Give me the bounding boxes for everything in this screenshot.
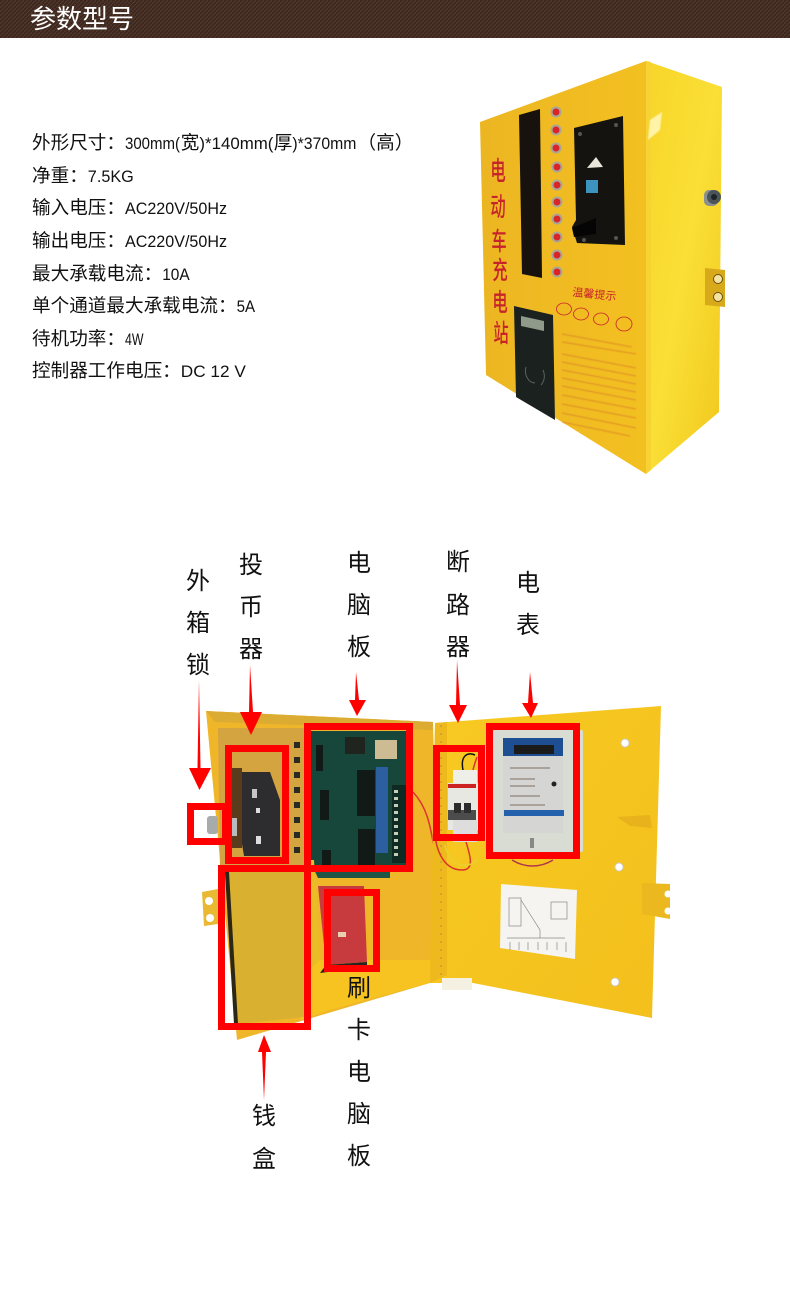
station name (490, 151, 509, 350)
money box (225, 860, 320, 1024)
spec: input voltage (32, 193, 227, 220)
breaker wiring (435, 754, 478, 870)
spec: dimensions: 300mm( (125, 134, 180, 153)
spec: dimensions: 外形尺寸： (32, 128, 125, 155)
specification list (32, 128, 413, 383)
arrow: money box (258, 1035, 271, 1100)
wiring diagram (500, 884, 577, 959)
label: money box: 盒 (252, 1139, 276, 1174)
spec: net weight: 净重： (32, 161, 88, 188)
spec: dimensions: )*140mm( (199, 134, 274, 153)
spec: input voltage: 输入电压： (32, 193, 125, 220)
spec: output voltage: 输出电压： (32, 226, 125, 253)
label: card board: 卡 (347, 1010, 371, 1045)
channel buttons (552, 108, 562, 276)
spec: net weight: 7.5KG (88, 167, 134, 186)
side bracket (202, 889, 218, 926)
coin acceptor (572, 116, 625, 245)
holes (611, 739, 629, 986)
label: control board: 电 (347, 543, 371, 578)
label: card board: 板 (347, 1136, 371, 1171)
station name: 电 (492, 283, 508, 319)
door panel (430, 706, 672, 1018)
spec: dimensions: 宽 (181, 128, 199, 155)
arrow: outer lock (189, 680, 211, 790)
spec: channel current: 5A (237, 297, 256, 316)
label: outer lock: 锁 (186, 645, 210, 680)
label: coin acceptor: 器 (239, 629, 263, 664)
label: card board: 脑 (347, 1094, 371, 1129)
station name: 动 (490, 187, 506, 225)
spec: controller voltage: 控制器工作电压： (32, 356, 181, 383)
spec: dimensions (32, 128, 413, 155)
spec: output voltage (32, 226, 227, 253)
arrow: breaker (449, 660, 467, 723)
flow ovals (556, 303, 632, 331)
label: coin acceptor: 投 (239, 545, 263, 580)
spec: dimensions: 厚 (274, 128, 292, 155)
spec: standby power: 待机功率： (32, 324, 125, 351)
red highlight boxes (190, 726, 576, 1026)
control circuit board (311, 731, 407, 878)
header title: 参数型号 (30, 0, 134, 36)
label: control board: 板 (347, 627, 371, 662)
notice lines (562, 334, 636, 436)
red arrows (189, 660, 538, 1100)
highlight: money box (222, 868, 308, 1026)
highlight: outer lock (190, 806, 226, 842)
cable knobs (294, 742, 300, 858)
spec: output voltage: AC220V/50Hz (125, 232, 227, 251)
label: card board: 电 (347, 1052, 371, 1087)
lock (704, 190, 721, 206)
highlight: card board (328, 892, 376, 968)
spec: standby power: 4W (125, 330, 144, 349)
spec: net weight (32, 161, 134, 188)
station name: 车 (491, 222, 507, 258)
hinge clip (617, 815, 652, 828)
spec: max current: 最大承载电流： (32, 259, 162, 286)
lock bolt (207, 816, 237, 836)
station name: 电 (490, 151, 506, 189)
exploded photo: opened charging station (202, 706, 672, 1040)
label: outer lock: 箱 (186, 603, 210, 638)
label: outer lock: 外 (186, 561, 210, 596)
label: card board: 刷 (347, 968, 371, 1003)
station name: 站 (493, 314, 509, 350)
card reader board (318, 886, 367, 973)
white tab (442, 978, 472, 990)
label: breaker: 器 (446, 627, 470, 662)
spec: input voltage: AC220V/50Hz (125, 199, 227, 218)
internal cables (413, 792, 436, 864)
coin mechanism (232, 768, 280, 856)
interior of cabinet (206, 711, 440, 1040)
electricity meter (493, 730, 583, 866)
highlight: breaker (436, 748, 482, 838)
header bar (0, 0, 790, 38)
tips heading: 温馨提示 (572, 284, 617, 304)
spec: max current: 10A (162, 265, 190, 284)
arrow: control board (349, 672, 366, 716)
highlight: control board (308, 726, 410, 868)
circuit breaker (448, 770, 478, 842)
label: breaker: 断 (446, 542, 470, 577)
spec: controller voltage (32, 356, 246, 383)
label: money box: 钱 (252, 1096, 276, 1131)
spec: dimensions: （高） (358, 128, 413, 155)
label: meter: 表 (516, 605, 540, 640)
station name: 充 (492, 251, 508, 287)
highlight: meter (490, 726, 576, 856)
door bracket (642, 883, 672, 919)
card reader (514, 306, 555, 420)
spec: channel current: 单个通道最大承载电流： (32, 291, 237, 318)
spec: dimensions: )*370mm (292, 134, 356, 153)
label: control board: 脑 (347, 585, 371, 620)
bracket (705, 268, 725, 307)
spec: controller voltage: DC 12 V (181, 362, 246, 381)
label: coin acceptor: 币 (239, 587, 263, 622)
display window (519, 109, 542, 278)
label: breaker: 路 (446, 585, 470, 620)
arrow: coin acceptor (240, 665, 262, 735)
product photo: closed charging station (480, 61, 725, 474)
highlight: coin acceptor (228, 748, 286, 860)
label: meter: 电 (516, 563, 540, 598)
arrow: meter (522, 672, 538, 718)
component labels (186, 542, 540, 1174)
